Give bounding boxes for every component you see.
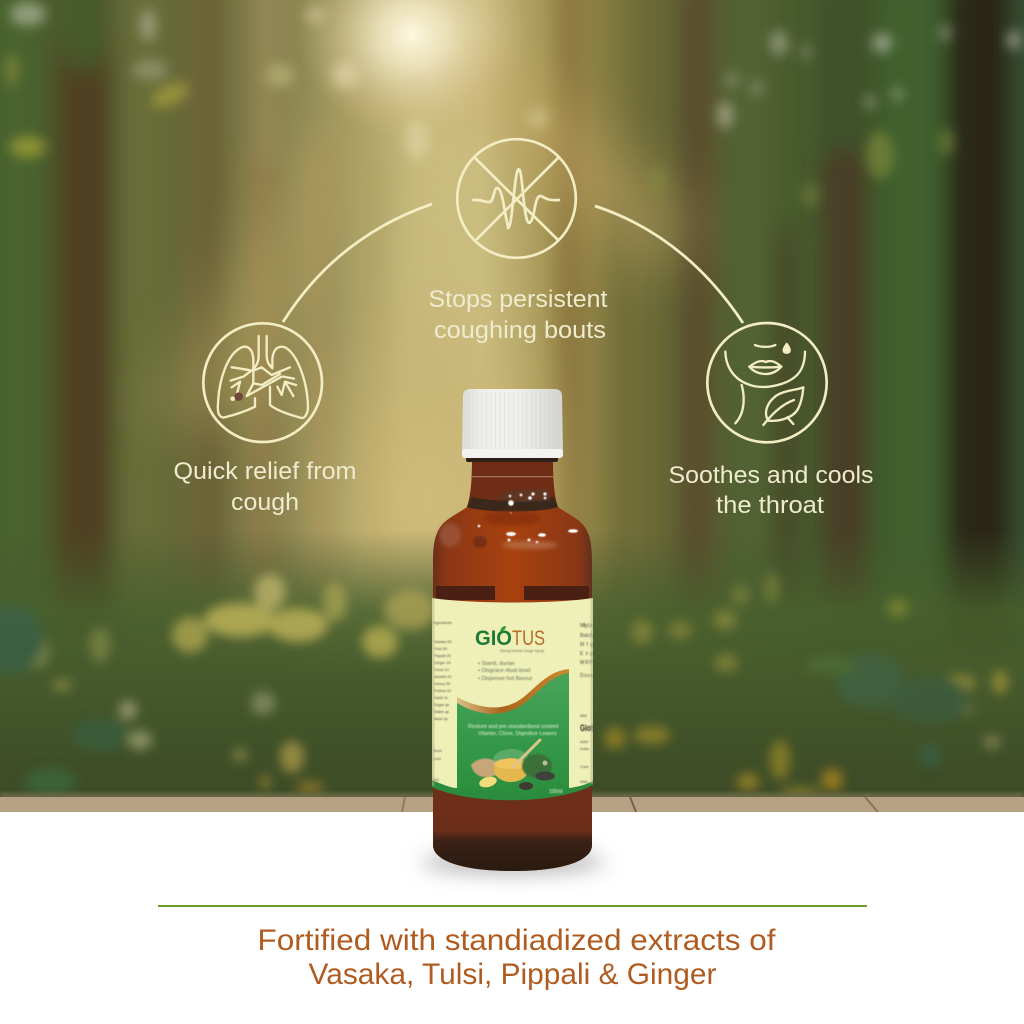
label: • Stand, durian (478, 661, 515, 667)
label: soothes and cools the throat (668, 462, 874, 519)
left panel microtext: Cool (433, 757, 441, 761)
logo: GIO (475, 626, 512, 650)
left panel microtext: Haldi 10 (434, 696, 448, 700)
right panel microtext: Dose (580, 673, 593, 679)
right panel microtext: Mfg (580, 642, 593, 648)
icon: throat with leaf (707, 323, 827, 442)
left panel microtext: Pudina 10 (434, 689, 451, 693)
left panel microtext: Honey 50 (434, 682, 450, 686)
lower liquid (433, 790, 592, 871)
bottom caption: Vasaka, Tulsi, Pippali & Ginger (308, 958, 716, 991)
right panel microtext: Mfg Lic (580, 623, 594, 629)
herbs and honey illustration (471, 740, 555, 790)
golden wave (457, 669, 569, 714)
bottom caption: Fortified with standiadized extracts of (258, 924, 776, 957)
right panel microtext: Giot (580, 723, 593, 733)
neck shading (466, 457, 558, 512)
label: stops persistent coughing bouts: Stops persistent (428, 286, 608, 313)
right panel microtext (580, 623, 594, 784)
label: soothes and cools the throat: the throat (716, 492, 824, 519)
right panel microtext: Care (580, 764, 589, 769)
left panel microtext: Clove 10 (434, 668, 449, 672)
right panel microtext: India (580, 746, 589, 751)
right panel microtext: Exp (580, 651, 593, 657)
left panel microtext (433, 621, 452, 782)
label: • Disgrace ritual bowl (478, 668, 530, 674)
icon: lungs (203, 323, 322, 442)
green panel with wave (457, 670, 569, 793)
left panel microtext: Ingredients (433, 621, 452, 625)
left panel microtext: Water qs (434, 710, 449, 714)
right panel microtext: Batch (580, 633, 593, 639)
label: Vitamin, Clove, Digestive Leaves (478, 731, 557, 737)
white table surface (0, 812, 1024, 1024)
logo: TUS (512, 626, 545, 650)
arc connector: left (283, 204, 432, 322)
label: Restore and pre-standardised content (468, 724, 559, 730)
left panel microtext: Base qs (434, 717, 448, 721)
bottom caption (258, 924, 776, 991)
label (432, 598, 594, 800)
label: soothes and cools the throat: Soothes and cools (668, 462, 874, 489)
left panel microtext: Dry (433, 778, 439, 782)
label: quick relief from cough: cough (231, 489, 299, 516)
dark reflections above label (436, 586, 495, 600)
wooden plank (0, 793, 1024, 812)
label: 100ml (549, 789, 563, 795)
label: quick relief from cough (174, 458, 356, 516)
label edge shading (432, 598, 434, 786)
bottle shadow (421, 850, 605, 874)
left panel microtext: Sugar qs (434, 703, 449, 707)
product bottle (432, 389, 594, 871)
label: stops persistent coughing bouts (428, 286, 608, 344)
icon: stop cough wave (457, 139, 576, 258)
left panel microtext: Mulethi 20 (434, 675, 452, 679)
logo (475, 626, 545, 650)
left panel microtext: Tulsi 50 (434, 647, 447, 651)
left panel microtext: Pippali 25 (434, 654, 451, 658)
left panel microtext: Store (433, 749, 442, 753)
right panel microtext: MRP (580, 660, 594, 666)
right panel microtext: Web (580, 779, 589, 784)
right panel microtext: Addr (580, 739, 589, 744)
label: stops persistent coughing bouts: coughing bouts (434, 317, 606, 344)
label: quick relief from cough: Quick relief from (174, 458, 356, 485)
label: • Dispense hot flavour (478, 676, 533, 682)
highlights (478, 492, 578, 543)
arc connector: right (595, 206, 743, 323)
divider line (158, 905, 867, 907)
forest background (0, 0, 1024, 812)
cap (462, 389, 563, 458)
left panel microtext: Vasaka 50 (434, 640, 452, 644)
left panel microtext: Ginger 25 (434, 661, 451, 665)
bottle glass body (433, 460, 592, 871)
label: Strong Herbal Cough Syrup (500, 649, 544, 653)
right panel microtext: Mfd (580, 713, 587, 718)
